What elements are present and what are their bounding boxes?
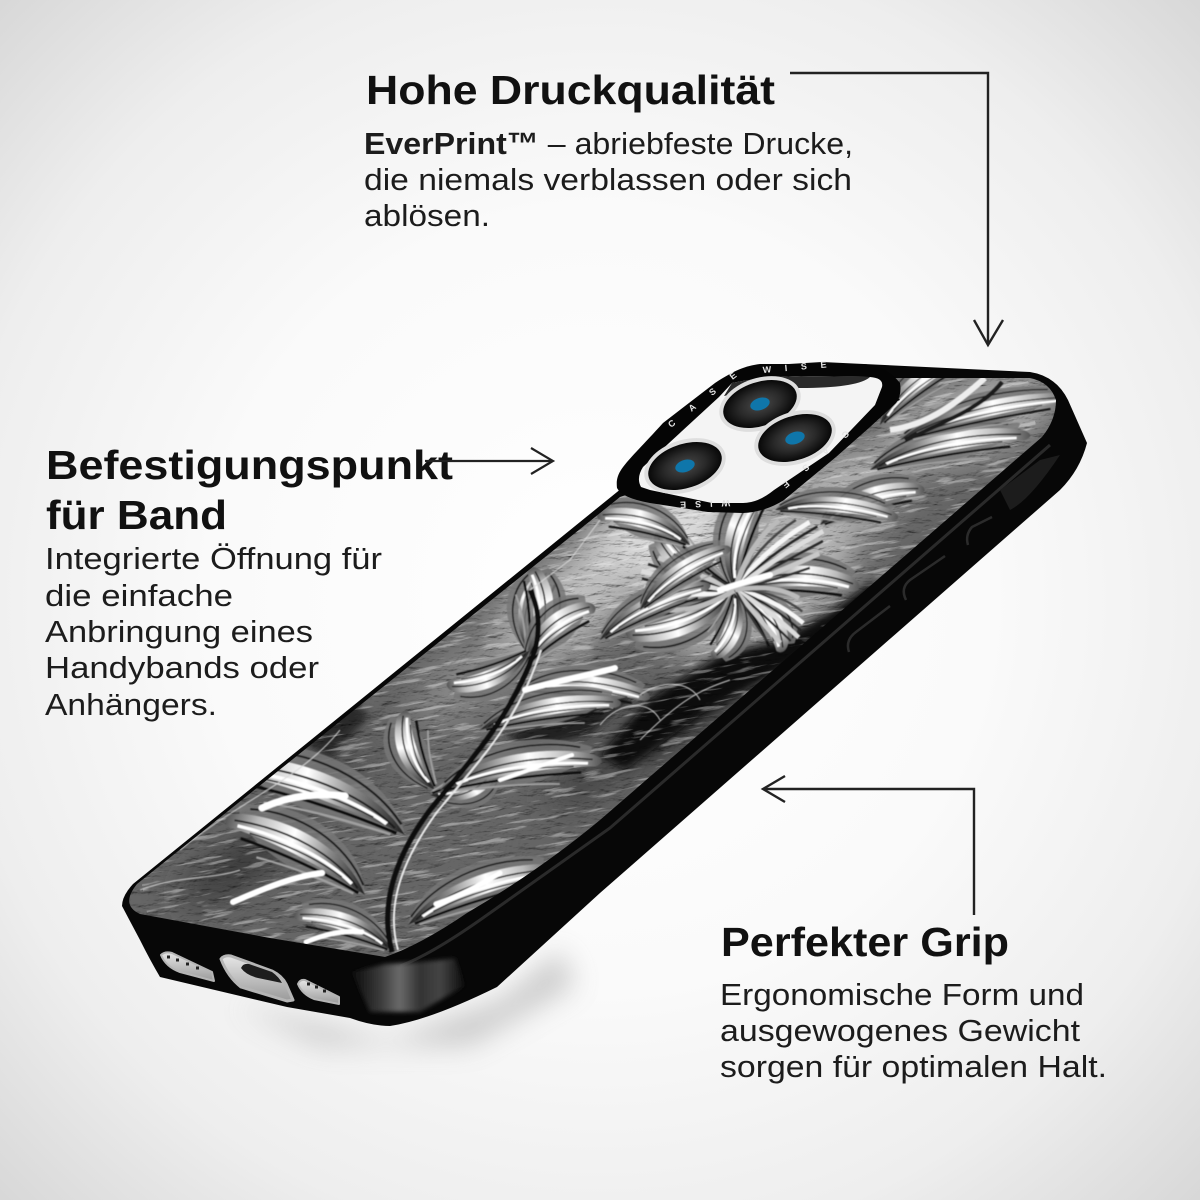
dark speckle band: [300, 582, 880, 770]
side edge sheen: [400, 445, 1050, 966]
heading: [46, 442, 453, 538]
body text: Anhängers.: [45, 687, 217, 722]
lower plumes: [212, 732, 603, 952]
lens right: [747, 400, 843, 476]
case body: [122, 362, 1087, 1026]
body text: sorgen für optimalen Halt.: [720, 1049, 1107, 1084]
tonal regions: [171, 357, 1066, 917]
bottom ports: [161, 952, 339, 1004]
scratch texture: [142, 378, 1036, 954]
main stem: [388, 590, 541, 952]
speaker right: [298, 980, 339, 1004]
camera surround: [617, 359, 900, 513]
heading: Perfekter Grip: [721, 919, 1009, 965]
central stem plumes: [381, 531, 739, 827]
body text: ablösen.: [364, 198, 490, 233]
base tone: [110, 360, 1070, 970]
body text: [45, 541, 382, 722]
bright highlights: [233, 575, 770, 942]
brand lettering: W I S E: [762, 359, 827, 375]
brand lettering: C A S E: [666, 370, 738, 430]
camera window: [639, 376, 882, 503]
arrow: print quality: [790, 73, 1003, 345]
body text: die niemals verblassen oder sich: [364, 162, 852, 197]
body text: ausgewogenes Gewicht: [720, 1013, 1080, 1048]
feather motifs: [140, 339, 1075, 952]
metallic texture: [110, 360, 1070, 970]
heading: für Band: [46, 492, 227, 538]
phone shadow: [235, 950, 575, 1045]
brand lettering: W I S E: [680, 498, 730, 510]
body text: Anbringung eines: [45, 614, 313, 649]
brand lettering: C A S E: [780, 428, 851, 490]
flower and upper scrolls: [596, 378, 1056, 662]
fine marble lines: [140, 520, 730, 890]
body text: Ergonomische Form und: [720, 977, 1084, 1012]
lens left: [637, 428, 733, 504]
charging port: [221, 956, 293, 1001]
callout: print quality: [364, 67, 853, 233]
body text: [364, 126, 853, 233]
corner highlight: [352, 958, 465, 1012]
brand lettering: [666, 359, 851, 510]
lens top: [712, 366, 808, 442]
heading: Befestigungspunkt: [46, 442, 453, 488]
arrow: strap attachment: [425, 448, 553, 474]
side buttons: [848, 455, 1060, 652]
camera ring: [617, 364, 900, 513]
body text: Handybands oder: [45, 650, 319, 685]
phone case: [122, 362, 1087, 1026]
callout: grip: [720, 919, 1107, 1084]
arrow: grip: [763, 776, 974, 915]
back panel: [129, 378, 1056, 957]
body text: Integrierte Öffnung für: [45, 541, 382, 576]
body text: die einfache: [45, 578, 233, 613]
inner rim shade: [724, 376, 870, 396]
speaker left: [161, 952, 214, 981]
body text: EverPrint™ – abriebfeste Drucke,: [364, 126, 853, 161]
body text: [720, 977, 1107, 1084]
heading: Hohe Druckqualität: [366, 67, 775, 113]
callout: strap attachment: [45, 442, 453, 722]
